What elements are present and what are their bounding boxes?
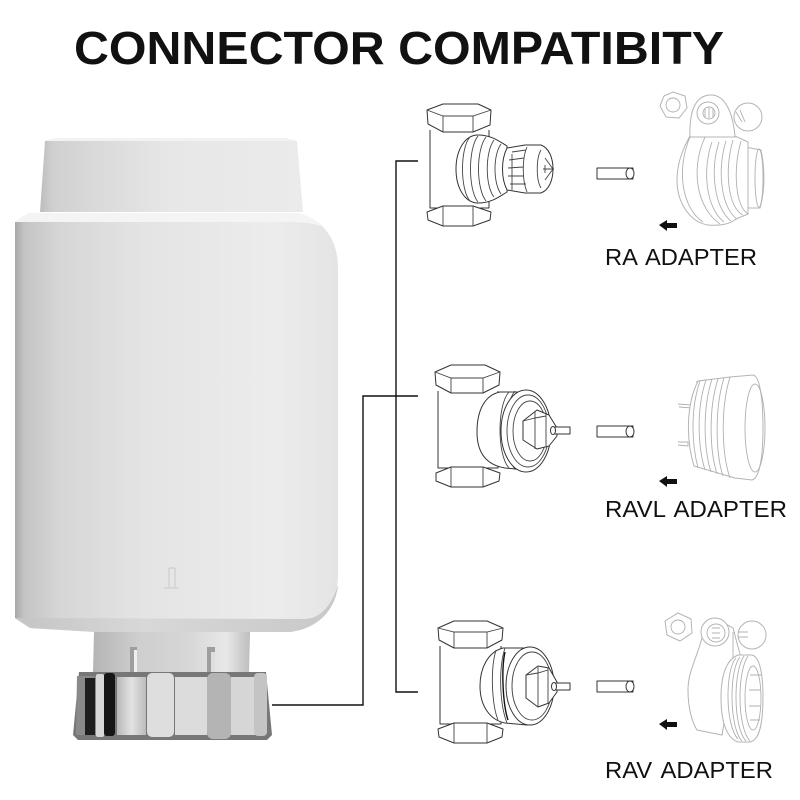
valve: RAV [438, 621, 570, 743]
pin: RAVL [597, 426, 634, 437]
thermostat product [15, 138, 338, 740]
label: RA adapter: RA ADAPTER [605, 244, 757, 270]
strap [688, 618, 741, 735]
body highlight [15, 213, 325, 228]
washer [738, 621, 766, 649]
adapter: RA [660, 92, 764, 225]
label: RAV adapter: RAV ADAPTER [605, 757, 773, 783]
adapter: RAVL [678, 375, 765, 480]
nut [660, 92, 687, 118]
body lower band [15, 585, 338, 632]
threaded ring [721, 655, 763, 742]
connector lines [272, 161, 418, 705]
nut [665, 613, 692, 641]
threaded tip [741, 147, 764, 208]
valve: RA [427, 104, 554, 226]
adapter: RAV [665, 613, 766, 742]
title: CONNECTOR COMPATIBITY [74, 22, 724, 74]
valve: RAVL [435, 365, 570, 487]
neck with slots [93, 632, 250, 672]
arrow: RA [659, 220, 677, 231]
thermostat main body [15, 213, 338, 632]
pin: RAV [597, 681, 634, 692]
thermostat top cap [40, 138, 303, 212]
arrow: RAVL [659, 476, 677, 487]
pin: RA [597, 168, 634, 179]
label: RAVL adapter: RAVL ADAPTER [605, 496, 787, 522]
washer [734, 103, 762, 131]
flange with strap [677, 136, 748, 225]
arrow: RAV [659, 719, 677, 730]
arrow mark on body [164, 568, 179, 588]
adjusting knob [73, 672, 272, 740]
